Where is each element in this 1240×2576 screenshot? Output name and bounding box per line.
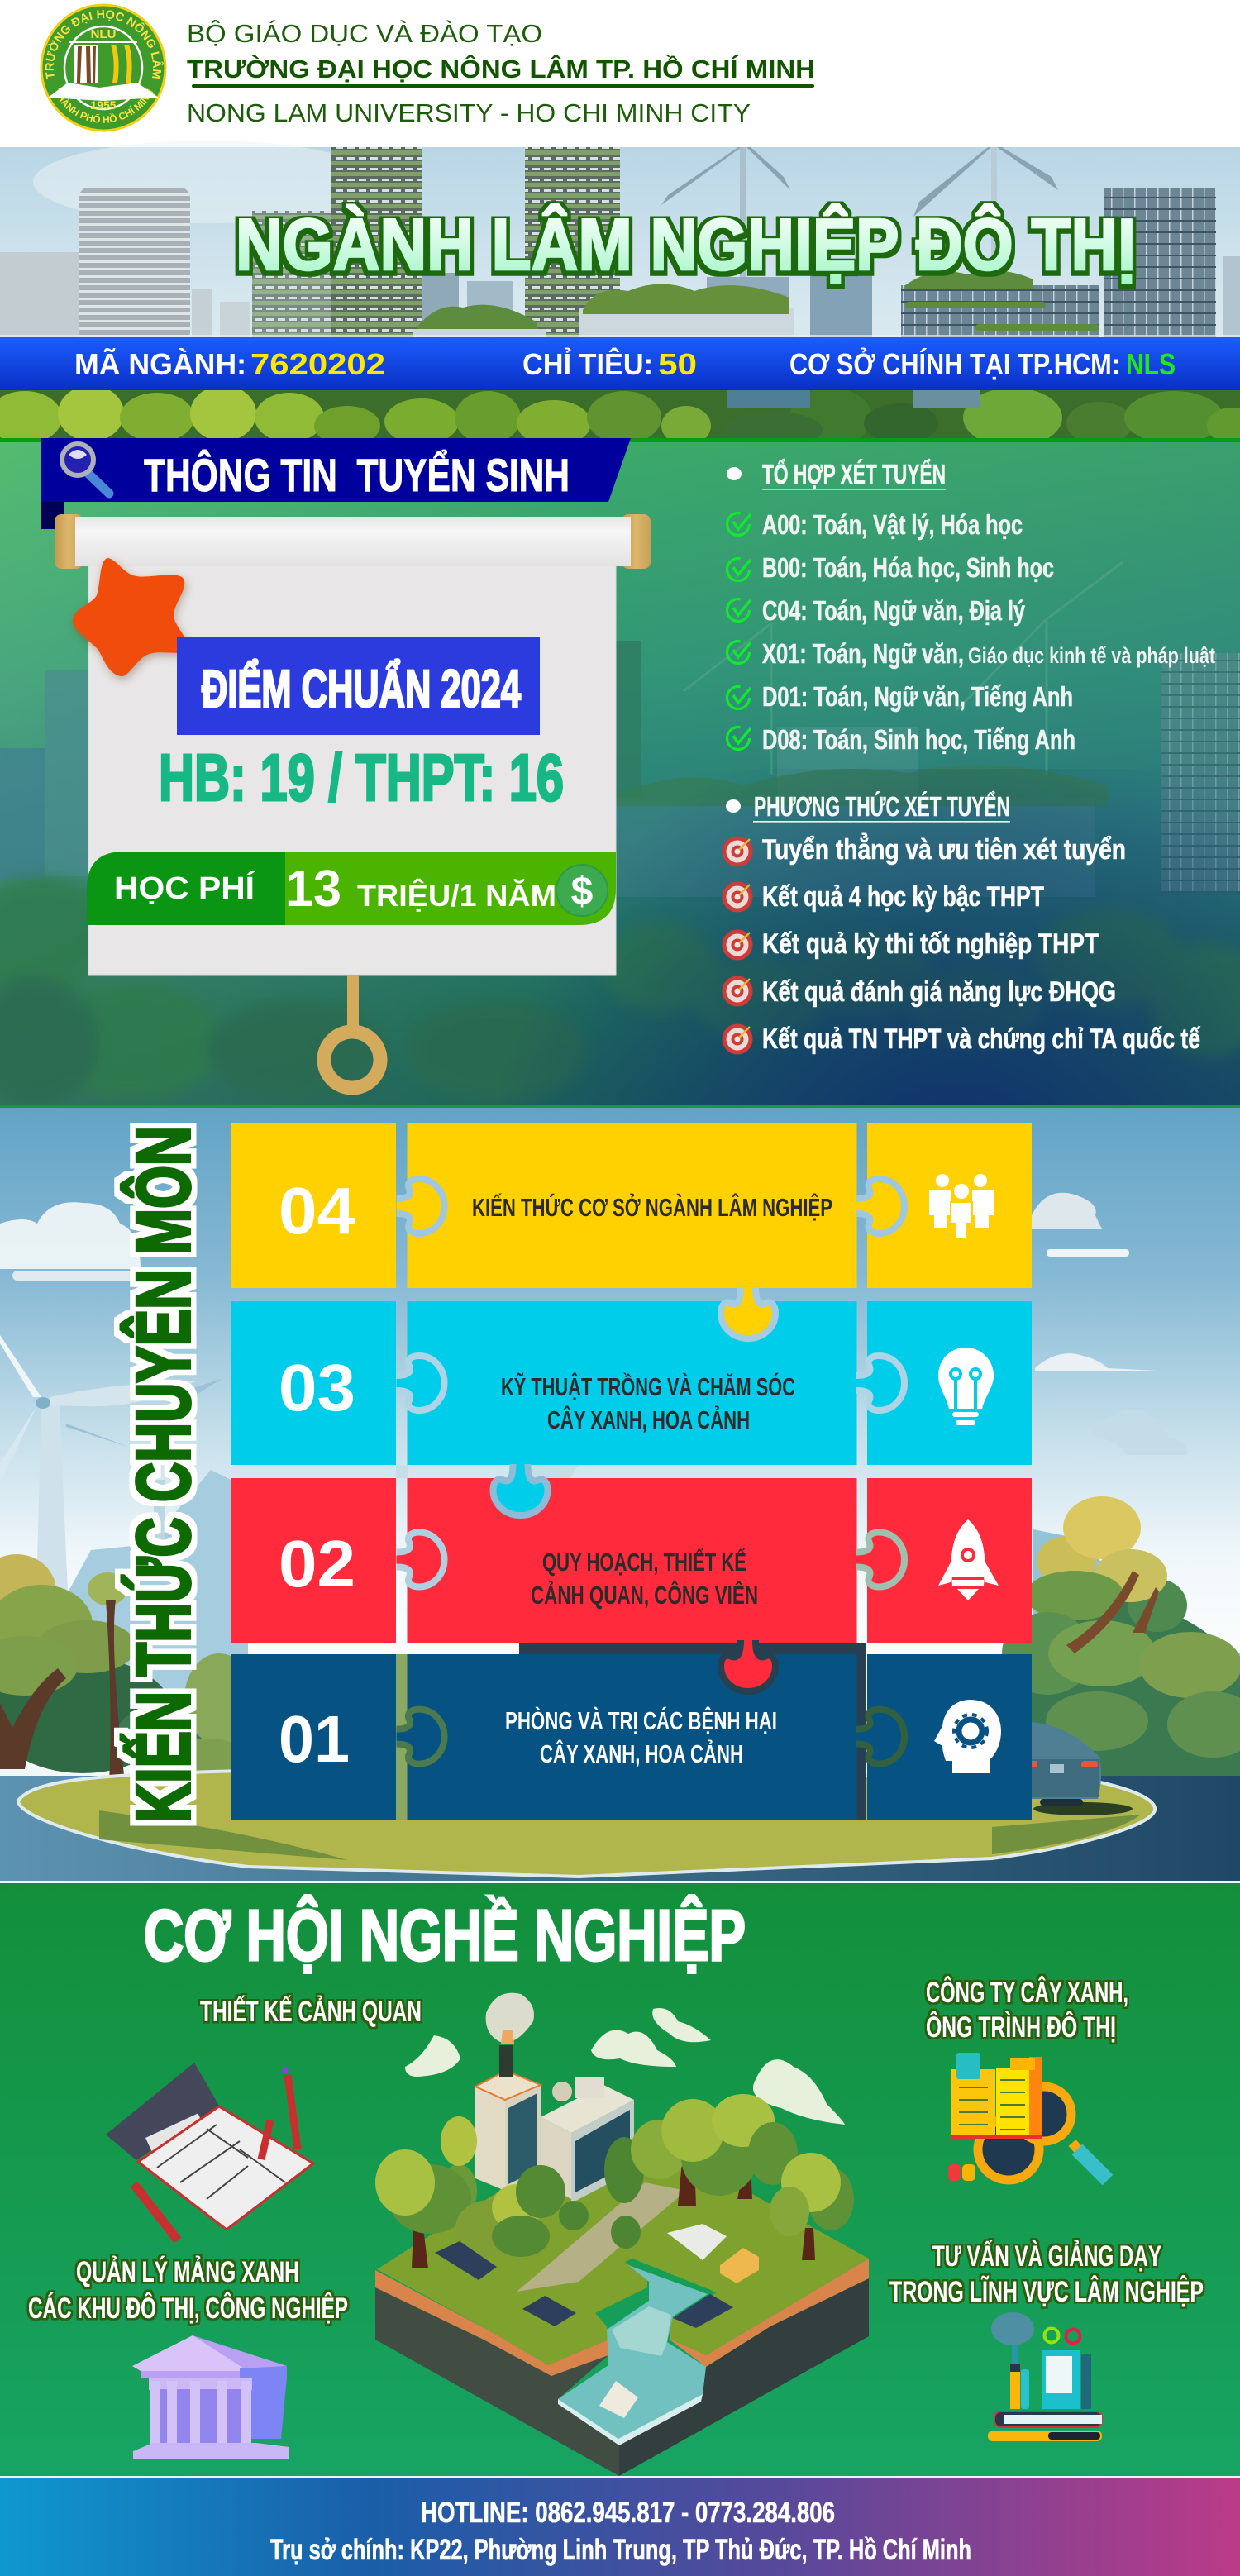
distant hills bbox=[66, 1470, 1240, 1736]
label: consulting and teaching bbox=[889, 2240, 1204, 2308]
ministry line: BỘ GIÁO DỤC VÀ ĐÀO TẠO bbox=[187, 19, 542, 48]
row 04: 04 bbox=[279, 1174, 356, 1247]
university logo: NLU bbox=[91, 27, 116, 41]
quota: CHỈ TIÊU: bbox=[522, 346, 653, 381]
row 04: KIẾN THỨC CƠ SỞ NGÀNH LÂM NGHIỆP bbox=[472, 1192, 832, 1222]
combination C04 bbox=[727, 595, 1025, 626]
heading: methods bbox=[726, 791, 1010, 823]
method 2: Kết quả 4 học kỳ bậc THPT bbox=[762, 881, 1044, 913]
row 01: 01 bbox=[279, 1702, 350, 1776]
row 04 bbox=[231, 1123, 1032, 1288]
row 02: CẢNH QUAN, CÔNG VIÊN bbox=[531, 1580, 758, 1610]
info band bbox=[0, 335, 1240, 390]
row 02 bbox=[231, 1464, 1032, 1643]
hanging pull ring bbox=[324, 975, 380, 1088]
vertical title: KIẾN THỨC CHUYÊN MÔN bbox=[120, 1126, 206, 1823]
combination A00: A00: Toán, Vật lý, Hóa học bbox=[762, 509, 1023, 540]
row 03: 03 bbox=[279, 1351, 355, 1424]
header: university identity bbox=[40, 3, 815, 132]
illustration: isometric green city bbox=[375, 1993, 869, 2476]
icon: magnifier bbox=[62, 444, 109, 494]
row 03 bbox=[231, 1287, 1032, 1465]
label: green companies: CÔNG TY CÂY XANH, bbox=[926, 1976, 1128, 2009]
combination B00 bbox=[727, 552, 1054, 583]
banner: admission info bbox=[41, 438, 631, 529]
university logo: THÀNH PHỐ HỒ CHÍ MINH bbox=[57, 88, 154, 123]
label: green space management: QUẢN LÝ MẢNG XANH bbox=[76, 2255, 299, 2288]
method 3: Kết quả kỳ thi tốt nghiệp THPT bbox=[762, 928, 1099, 960]
left trees bbox=[0, 1554, 254, 1810]
heading: careers: CƠ HỘI NGHỀ NGHIỆP bbox=[144, 1896, 746, 1976]
panel: admission information bbox=[0, 438, 1240, 1108]
university logo bbox=[40, 3, 167, 132]
admission methods bbox=[724, 791, 1200, 1055]
row 01: CÂY XANH, HOA CẢNH bbox=[540, 1739, 743, 1768]
row 01 bbox=[231, 1640, 1032, 1820]
icon: notebook bbox=[106, 2063, 313, 2240]
label: green space management: CÁC KHU ĐÔ THỊ, CÔNG NGHIỆP bbox=[28, 2292, 348, 2325]
road bbox=[0, 1776, 1240, 1882]
quota: 50 bbox=[658, 347, 697, 381]
campus: CƠ SỞ CHÍNH TẠI TP.HCM: bbox=[789, 346, 1120, 381]
right building bbox=[541, 2117, 571, 2199]
path bbox=[517, 2182, 686, 2292]
major code bbox=[74, 346, 385, 381]
label: green space management bbox=[28, 2255, 348, 2325]
icon: open book and magnifiers bbox=[948, 2053, 1108, 2181]
back lawn and ground bbox=[377, 2125, 869, 2365]
row 01: PHÒNG VÀ TRỊ CÁC BỆNH HẠI bbox=[505, 1705, 777, 1735]
panel: career opportunities bbox=[0, 1881, 1240, 2477]
trees bbox=[375, 2094, 854, 2268]
scores: HB: 19 / THPT: 16 bbox=[159, 741, 564, 814]
tuition bar bbox=[87, 852, 616, 925]
solar panels bbox=[435, 2241, 733, 2328]
background forest bbox=[0, 876, 1240, 1108]
clouds bbox=[0, 1193, 1187, 1455]
scroll panel bbox=[55, 514, 651, 1088]
university name: TRƯỜNG ĐẠI HỌC NÔNG LÂM TP. HỒ CHÍ MINH bbox=[187, 54, 815, 83]
icon: dollar coin bbox=[556, 865, 608, 916]
english name: NONG LAM UNIVERSITY - HO CHI MINH CITY bbox=[187, 98, 751, 127]
score box bbox=[177, 637, 540, 735]
label: landscape design: THIẾT KẾ CẢNH QUAN bbox=[200, 1995, 422, 2028]
footer: contact bbox=[0, 2476, 1240, 2576]
tuition bar: 13 bbox=[285, 861, 341, 918]
subject combinations bbox=[727, 459, 1215, 755]
water bbox=[558, 2265, 708, 2439]
star bbox=[73, 558, 188, 676]
major code: MÃ NGÀNH: bbox=[74, 346, 246, 381]
tuition bar: TRIỆU/1 NĂM bbox=[357, 878, 556, 913]
heading: combinations: TỔ HỢP XÉT TUYỂN bbox=[762, 459, 946, 489]
icon: people bbox=[929, 1174, 994, 1238]
method 4: Kết quả đánh giá năng lực ĐHQG bbox=[762, 976, 1116, 1008]
icon: temple bbox=[132, 2335, 289, 2459]
left building bbox=[475, 2087, 505, 2191]
combination X01: X01: Toán, Ngữ văn, bbox=[762, 638, 964, 669]
icon: lightbulb bbox=[938, 1348, 994, 1425]
combination C04: C04: Toán, Ngữ văn, Địa lý bbox=[762, 595, 1025, 626]
pencils bbox=[134, 2184, 178, 2240]
campus: NLS bbox=[1126, 347, 1176, 381]
car bbox=[1029, 1722, 1101, 1806]
row 02: 02 bbox=[279, 1527, 355, 1600]
island bbox=[18, 1771, 1155, 1877]
wind turbine bbox=[0, 1335, 222, 1591]
heading: methods: PHƯƠNG THỨC XÉT TUYỂN bbox=[754, 791, 1010, 822]
icon: head with gear bbox=[934, 1700, 1001, 1773]
row 03: KỸ THUẬT TRỒNG VÀ CHĂM SÓC bbox=[501, 1371, 795, 1401]
label: green companies: ÔNG TRÌNH ĐÔ THỊ bbox=[926, 2011, 1116, 2044]
icon: teaching books and tools bbox=[988, 2312, 1102, 2441]
panel: specialised knowledge bbox=[0, 1105, 1240, 1882]
method 1: Tuyển thẳng và ưu tiên xét tuyển bbox=[762, 833, 1126, 866]
combination D01: D01: Toán, Ngữ văn, Tiếng Anh bbox=[762, 681, 1073, 712]
row 03: CÂY XANH, HOA CẢNH bbox=[547, 1405, 750, 1434]
icon: rocket bbox=[938, 1519, 999, 1600]
left side faces bbox=[375, 2287, 619, 2476]
right trees bbox=[1002, 1496, 1240, 1777]
heading: combinations bbox=[727, 459, 946, 490]
title: NGÀNH LÂM NGHIỆP ĐÔ THỊ bbox=[236, 203, 1136, 285]
combination A00 bbox=[727, 509, 1023, 540]
label: green companies bbox=[926, 1976, 1128, 2044]
tuition bar: HỌC PHÍ bbox=[114, 870, 256, 906]
combination D08: D08: Toán, Sinh học, Tiếng Anh bbox=[762, 724, 1075, 755]
heading: admission info: THÔNG TIN TUYỂN SINH bbox=[144, 449, 570, 501]
clouds bbox=[405, 1993, 845, 2125]
address: Trụ sở chính: KP22, Phường Linh Trung, TP Thủ Đức, TP. Hồ Chí Minh bbox=[270, 2534, 971, 2566]
major code: 7620202 bbox=[250, 347, 385, 381]
hotline: HOTLINE: 0862.945.817 - 0773.284.806 bbox=[421, 2497, 835, 2529]
score box: ĐIỂM CHUẨN 2024 bbox=[202, 658, 521, 718]
central scene behind puzzle bbox=[396, 1465, 866, 1820]
university logo: TRƯỜNG ĐẠI HỌC NÔNG LÂM bbox=[45, 10, 164, 79]
hero: city background bbox=[0, 141, 1240, 448]
university logo: 1955 bbox=[90, 98, 117, 112]
icon: dollar coin: $ bbox=[571, 870, 594, 914]
row 02: QUY HOẠCH, THIẾT KẾ bbox=[542, 1548, 746, 1577]
combination X01 bbox=[727, 638, 1215, 669]
right side faces bbox=[619, 2278, 869, 2476]
combination B00: B00: Toán, Hóa học, Sinh học bbox=[762, 552, 1054, 583]
